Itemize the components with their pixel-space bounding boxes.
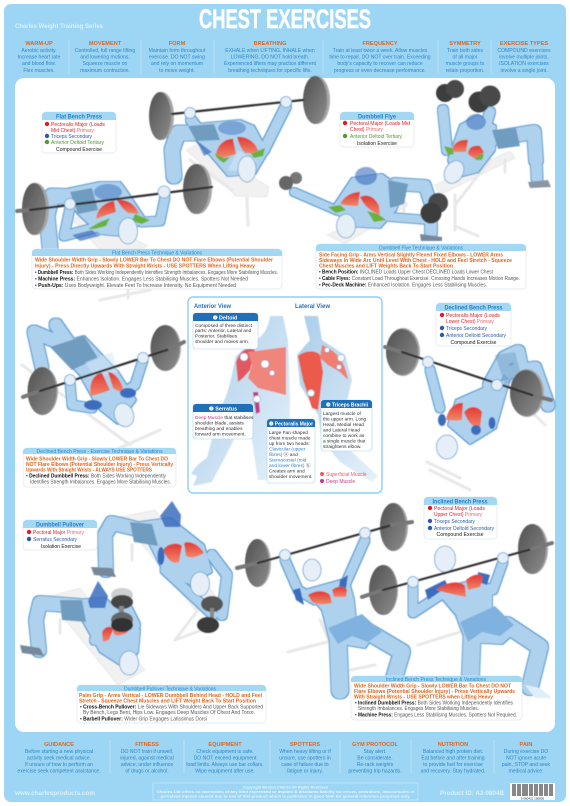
figure: declined bench press, left [22,325,184,450]
technique box: inclined bench press: Inclined Bench Press Technique & Variations [386,677,486,683]
tip: nutrition: Balanced high protein diet. [423,749,483,755]
card: declined bench press: Lower Chest) Primary [446,319,494,325]
card: dumbbell flye: Chest) Primary [350,127,383,133]
callout: triceps brachii: the upper arm. Long [323,416,367,422]
callout: serratus: Deep Muscle that stabilises [195,415,254,421]
card: inclined bench press: Triceps Secondary [434,519,475,525]
tip: nutrition: to provide fuel for exercise [423,762,483,768]
technique box: dumbbell flye [316,244,526,289]
technique box: dumbbell pullover: • Cross-Bench Pullover: Lie Sideways With Shoulders And Upper Back Supported [80,704,263,710]
card: inclined bench press: Anterior Deltoid Secondary [434,526,494,532]
callout: serratus: shoulder blade, assists [195,420,244,426]
tip: frequency: FREQUENCY [362,41,398,47]
tip: spotters: case of failure due to [281,762,329,768]
tip: equipment: Check equipment is safe. [196,749,254,755]
tip: pain: pain, STOP and seek [502,762,551,768]
technique box: declined bench press: NOT Flare Elbows (Potential Shoulder Injury) - Press Vertically [26,462,173,468]
card: dumbbell flye: Pectoral Major (Loads Mid [350,121,410,127]
tip: equipment: EQUIPMENT [208,742,242,748]
technique box: inclined bench press: • Inclined Dumbbell Press: Both Sides Working Independently Identifies [355,700,513,706]
card: declined bench press: Compound Exercise [450,340,497,346]
technique box: flat bench press: • Dumbbell Press: Both Sides Working Independently Identifies Strength Imbalances. Engages More Stabilising Muscles. [35,270,278,276]
tip: breathing: Experienced lifters may practice different [224,61,317,67]
card: dumbbell pullover [23,520,97,550]
tip: warm-up [18,41,61,74]
tip: equipment: Wipe equipment after use. [195,768,255,774]
tip: breathing: breathing techniques for specific lifts. [228,68,312,74]
card: flat bench press: Anterior Deltoid Tertiary [51,140,104,146]
figure: flat bench press, upper [149,76,330,225]
callout: triceps brachii: Largest muscle of [323,411,362,417]
callout: serratus: ❹ Serratus [209,406,237,412]
card: inclined bench press [424,497,497,539]
tip: gym protocol: preventing trip hazards. [348,768,402,774]
tip: spotters: unsure, use spotters in [279,756,331,762]
figure: inclined bench press, left [237,503,412,690]
tip: spotters: fatigue or injury. [287,768,323,774]
card: flat bench press: Triceps Secondary [51,134,92,140]
tip: frequency: time to repair. DO NOT over train. Exceeding [329,54,431,60]
tip: breathing: LOWERING. DO NOT hold breath. [231,54,309,60]
tip: gym protocol: GYM PROTOCOL [352,742,399,748]
leg fade at panel bottom [320,695,490,732]
anterior view heading: Anterior View [194,303,231,310]
card: dumbbell flye [340,112,414,147]
card: flat bench press [42,112,116,153]
tip: symmetry: retain proportion. [446,68,484,74]
technique box: dumbbell flye: • Bench Position: INCLINED Loads Upper Chest DECLINED Loads Lower Chest [319,270,494,276]
tip: guidance: If unsure of how to perform an [25,762,93,768]
tip: equipment: load limits. Always use bar collars. [186,762,264,768]
legend: muscle types: Superficial Muscle [326,472,367,478]
tip: movement: Controlled, full range lifting [75,48,135,54]
top tips row [18,40,551,74]
callout: deltoid: parts: Anterior, Lateral and [195,328,252,334]
disclaimer box: Charles Ltd offers no warranties of any kind expressed or implied & disclaims liability for errors, omissions, inaccuracies or [156,790,415,794]
tip: guidance [17,742,101,774]
tip: fitness: FITNESS [135,742,159,748]
card: flat bench press: Pectoralis Major (Loads [51,122,105,128]
callout: triceps brachii: a single muscle that [323,438,366,444]
card: declined bench press: Declined Bench Press [444,304,503,312]
card: declined bench press: Triceps Secondary [446,326,487,332]
technique box: inclined bench press [351,676,522,720]
product id: Product ID: A2-0804B [440,790,504,797]
tip: warm-up: Increase heart rate [18,54,61,60]
tip: nutrition: and recovery. Stay hydrated. [421,768,485,774]
technique box: declined bench press: Wide Shoulder Width Grip - Slowly LOWER Bar To Chest DO [26,456,168,462]
tip: fitness: of drugs or alcohol. [125,768,169,774]
callout: pectoralis major: Sternocostal (mid [269,458,307,464]
disclaimer box [153,783,418,800]
bottom tips row [17,740,551,774]
lateral view heading: Lateral View [295,303,330,310]
tip: breathing: BREATHING [254,41,286,47]
figure: flat bench press, lower [17,164,212,300]
tip: exercise types: COMPOUND exercises [497,48,551,54]
tip: pain: NOT ignore acute [506,756,546,762]
tip: exercise types [497,41,551,74]
legend: muscle types: Deep Muscle [326,479,355,485]
callout: triceps brachii: straightens elbow. [323,444,361,450]
tip: symmetry: muscle groups to [446,61,485,67]
figure: declined bench press, right [385,328,551,490]
tip: fitness: advice, under influence [121,762,173,768]
callout: pectoralis major: up from two heads: [269,441,310,447]
barcode: 5 060421 150826 [521,796,545,800]
callout: pectoralis major: ❷ Pectoralis Major [269,422,314,428]
tip: symmetry [446,41,485,74]
callout: deltoid: Posterior. Stabilises [195,334,238,340]
callout: pectoralis major: fibres) ⓐ and [269,451,298,458]
technique box: dumbbell flye: Sideways In Wide Arc Until Level With Chest - HOLD and Feel Stretch - Squeeze [319,258,512,264]
tip: frequency: progress or even decrease performance. [334,68,426,74]
tip: spotters [279,742,331,774]
lateral body illustration [297,316,378,482]
tip: spotters: SPOTTERS [290,742,320,748]
tip: pain: PAIN [520,742,532,748]
callout: serratus: breathing and enables [195,426,243,432]
technique box: inclined bench press: Strength Imbalances. Engages More Stabilising Muscles. [358,706,479,712]
callout: pectoralis major: Clavicular (upper [269,446,306,452]
callout: pectoralis major: and lower fibres) ⓑ [269,462,311,469]
card: dumbbell pullover: Dumbbell Pullover [36,522,84,528]
figure: dumbbell pullover, arms back [91,501,227,640]
card: dumbbell flye: Dumbbell Flye [358,114,396,120]
card: dumbbell flye: Isolation Exercise [357,141,397,147]
disclaimer box: perceived injuries caused due to use of this product which is published in good faith for general reference purposes only. [160,794,410,798]
tip: movement: Squeeze muscle on [83,61,128,67]
card: declined bench press: Anterior Deltoid Secondary [446,333,506,339]
legend: muscle types [320,472,367,485]
tip: warm-up: WARM-UP [25,41,53,47]
tip: gym protocol: Re-rack weights [357,762,394,768]
tip: spotters: When heavy lifting or if [279,749,331,755]
technique box: declined bench press: Upwards With Straight Wrists - ALWAYS USE SPOTTERS [26,468,153,474]
anatomy panel [188,297,382,493]
card: dumbbell pullover: Isolation Exercise [41,544,81,550]
tip: movement: and lowering motions. [80,54,130,60]
technique box: flat bench press: Wide Shoulder Width Grip - Slowly LOWER Bar To Chest DO NOT Flare Elbows (Potential Shoulder [35,258,273,264]
tip: form: FORM [169,41,186,47]
technique box: inclined bench press: • Machine Press: Engages Less Stabilising Muscles. Spotters Not Required. [355,712,517,718]
tip: form: exercise. DO NOT swing [149,54,205,60]
title: CHEST EXERCISES [199,4,371,34]
tip: form: to move weight. [159,68,195,74]
callout: triceps brachii: ❸ Triceps Brachii [326,402,368,408]
disclaimer box: Copyright Weston Charles All Rights Reserved [243,786,328,790]
tip: exercise types: involve a single joint. [500,68,548,74]
tip: movement [75,41,135,74]
tip: guidance: GUIDANCE [44,742,74,748]
tip: form: and rely on momentum [151,61,203,67]
tip: nutrition: Eat before and after training [421,756,485,762]
callout: triceps brachii [321,400,372,451]
tip: equipment [186,742,264,774]
series label: Charles Weight Training Series [15,24,104,30]
figure: dumbbell flye, arms raised [435,80,551,236]
callout: serratus [193,404,254,439]
technique box: dumbbell flye: • Cable Flyes: Constant Load Throughout Exercise. Crossing Hands Increases Motion Range. [319,276,520,282]
card: flat bench press: Flat Bench Press [56,114,102,120]
technique box: flat bench press: • Push-Ups: Uses Bodyweight. Elevate Feet To Increase Intensity. No Equipment Needed [35,283,236,289]
tip: warm-up: Flex muscles. [23,68,55,74]
callout: triceps brachii: Head, Medial Head [323,422,364,428]
tip: gym protocol: Stay alert. [364,749,386,755]
tip: frequency [329,41,431,74]
technique box: flat bench press: Flat Bench Press Technique & Variations [112,250,202,256]
technique box: declined bench press [23,448,176,487]
technique box: inclined bench press: Wide Shoulder Width Grip - Slowly LOWER Bar To Chest DO NOT [354,684,511,690]
technique box: declined bench press: • Declined Dumbbell Press: Both Sides Working Independently [26,474,166,480]
tip: pain: During exercise DO [504,749,548,755]
tip: nutrition: NUTRITION [438,742,468,748]
callout: deltoid [193,313,258,349]
technique box: flat bench press [32,249,282,289]
card: declined bench press [436,303,511,346]
tip: form [149,41,206,74]
technique box: flat bench press: • Machine Press: Enhances Isolation. Engages Less Stabilising Muscles. Spotters Not Needed [35,276,248,282]
tip: guidance: Before starting a new physical [25,749,93,755]
card: flat bench press: Compound Exercise [56,147,102,153]
card: inclined bench press: Pectoral Major (Loads [434,506,485,512]
callout: triceps brachii: and Lateral Head [323,428,360,434]
technique box: dumbbell flye: Chest Muscles and LIFT Weights Back To Start Position [319,264,453,270]
callout: pectoralis major: shoulder movement. [269,474,312,480]
barcode [510,783,555,800]
tip: fitness [120,742,174,774]
tip: gym protocol [348,742,402,774]
card: dumbbell flye: Anterior Deltoid Tertiary [350,134,402,140]
callout: deltoid: Composed of three distinct [195,323,253,329]
tip: form: Maintain form throughout [149,48,206,54]
technique box: inclined bench press: With Straight Wrists - USE SPOTTERS when Lifting Heavy [354,694,493,700]
technique box: dumbbell pullover: Dumbbell Pullover Technique & Variations [124,686,216,692]
tip: pain: medical advice. [508,768,544,774]
tip: warm-up: Aerobic activity. [21,48,57,54]
tip: movement: maximum contraction. [80,68,130,74]
tip: symmetry: of all major [453,54,478,60]
tip: exercise types: ISOLATION exercises [499,61,549,67]
technique box: dumbbell pullover: Stretch - Squeeze Chest Muscles and LIFT Weight Back To Start Position [79,698,256,704]
tip: gym protocol: Be considerate. [357,756,393,762]
figure: dumbbell pullover, arms up [20,581,145,685]
figure: dumbbell flye, arms lowered [279,167,448,244]
technique box: dumbbell flye: Dumbbell Flye Technique & Variations [379,246,463,252]
tip: guidance: activity seek medical advice. [27,756,91,762]
callout: deltoid: ❶ Deltoid [213,316,237,322]
card: dumbbell pullover: Serratus Secondary [33,537,77,543]
card: declined bench press: Pectoralis Major (Loads [446,313,500,319]
white content panel [15,78,555,732]
tip: guidance: exercise seek competent assistance. [17,768,101,774]
technique box: dumbbell pullover [77,685,266,723]
figure: inclined bench press, right [362,524,552,698]
card: inclined bench press: Upper Chest) Primary [434,512,482,518]
technique box: inclined bench press: Flare Elbows (Potential Shoulder Injury) - Press Vertically Upwards [354,689,515,695]
anterior body illustration [191,316,290,486]
tip: nutrition [421,742,485,774]
tip: symmetry: Train both sides [447,48,483,54]
technique box: dumbbell flye: • Pec-Deck Machine: Enhanced Isolation. Engages Less Stabilising Muscles. [319,282,487,288]
tip: equipment: DO NOT exceed equipment [194,756,257,762]
technique box: dumbbell pullover: • Barbell Pullover: Wider Grip Engages Latissimus Dorsi [80,716,207,722]
technique box: declined bench press: Declined Bench Press - Exercise Technique & Variations [36,449,163,455]
tip: exercise types: EXERCISE TYPES [500,41,548,47]
tip: warm-up: and blood flow. [22,61,56,67]
tip: symmetry: SYMMETRY [449,41,481,47]
tip: fitness: DO NOT train if unwell, [121,749,173,755]
tip: fitness: injured, against medical [120,756,174,762]
tip: exercise types: involve multiple joints. [499,54,549,60]
website: www.charlesproducts.com [14,790,95,797]
technique box: dumbbell flye: Side Facing Grip - Arms Vertical Slightly Flexed Fixed Elbows - LOWER Arms [319,252,503,258]
tip: movement: MOVEMENT [89,41,122,47]
card: inclined bench press: Inclined Bench Press [432,498,488,506]
callout: triceps brachii: combine to work as [323,433,365,439]
callout: pectoralis major: Large Fan shaped [269,430,308,436]
callout: pectoralis major: chest muscle made [269,436,311,442]
callout: serratus: forward arm movement. [195,432,246,438]
tip: breathing: EXHALE when LIFTING, INHALE when [225,48,315,54]
card: inclined bench press: Compound Exercise [436,532,484,538]
callout: pectoralis major [267,419,315,483]
callout: pectoralis major: Creates arm and [269,468,305,474]
technique box: declined bench press: Identifies Strength Imbalances. Engages More Stabilising Muscles. [30,480,171,486]
tip: frequency: body's capacity to recover can reduce [337,61,423,67]
technique box: dumbbell pullover: Palm Grip - Arms Vertical - LOWER Dumbbell Behind Head - HOLD and Feel [79,693,263,699]
technique box: dumbbell pullover: By Bench, Legs Bent, Hips Low. Engages Deep Muscles Of Chest And Torso. [83,710,255,716]
tip: frequency: Train at least twice a week. Allow muscles [333,48,428,54]
callout: deltoid: shoulder and moves arm. [195,339,249,345]
tip: breathing [224,41,317,74]
card: dumbbell pullover: Pectoral Major Primary [33,530,84,536]
tip: pain [502,742,551,774]
technique box: flat bench press: Injury) - Press Directly Upwards With Straight Wrists - USE SPOTTERS When Lifting Heavy [35,264,255,270]
card: flat bench press: Mid Chest) Primary [51,128,94,134]
